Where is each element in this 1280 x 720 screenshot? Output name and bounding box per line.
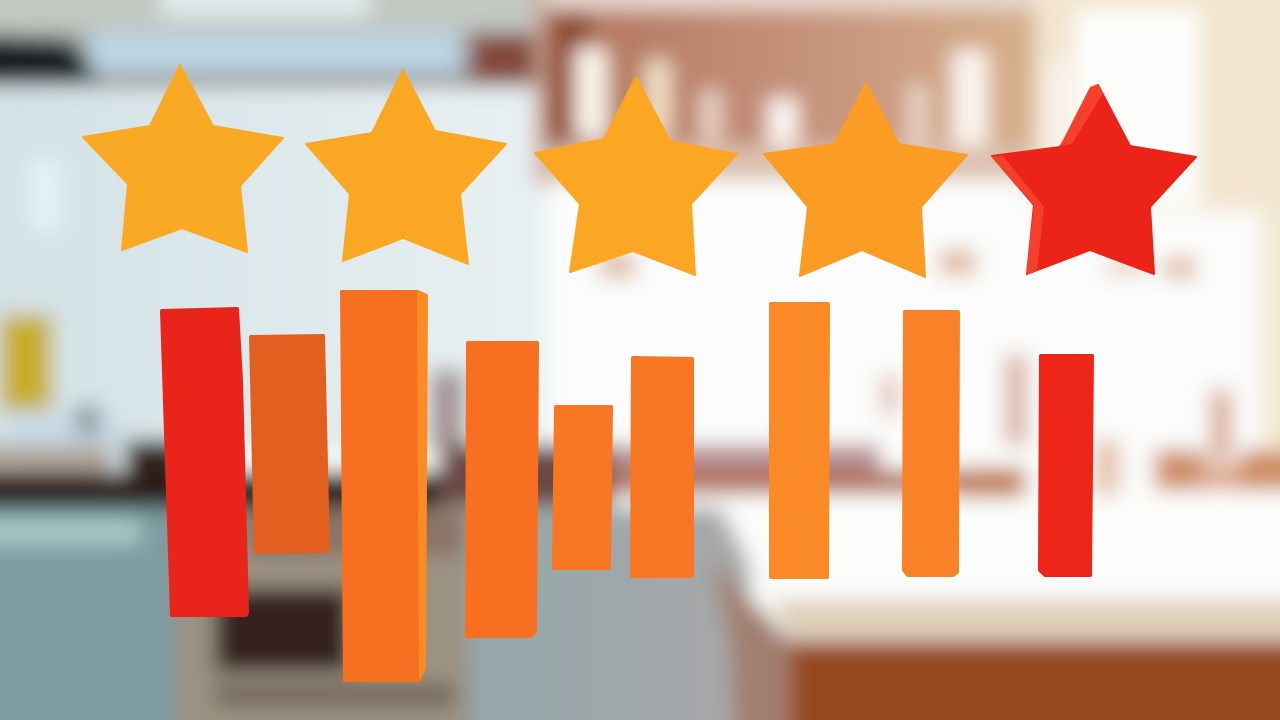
bar 9 (red) bbox=[1040, 356, 1092, 575]
bar 4 bbox=[467, 343, 537, 636]
bar group bbox=[162, 291, 1092, 680]
star 4 bbox=[764, 83, 967, 277]
bar 1 bbox=[162, 309, 247, 615]
star 2 bbox=[306, 70, 506, 264]
star rating row bbox=[83, 65, 1196, 277]
star 3 bbox=[535, 77, 737, 275]
bar 2 bbox=[251, 336, 328, 552]
bar 6 bbox=[632, 358, 692, 576]
star 1 bbox=[83, 65, 283, 252]
star 5 (red) bbox=[991, 84, 1196, 275]
bar 5 bbox=[554, 407, 611, 568]
bar 7 bbox=[771, 304, 828, 577]
bar 8 bbox=[904, 312, 958, 575]
bar 3 bbox=[342, 291, 427, 680]
